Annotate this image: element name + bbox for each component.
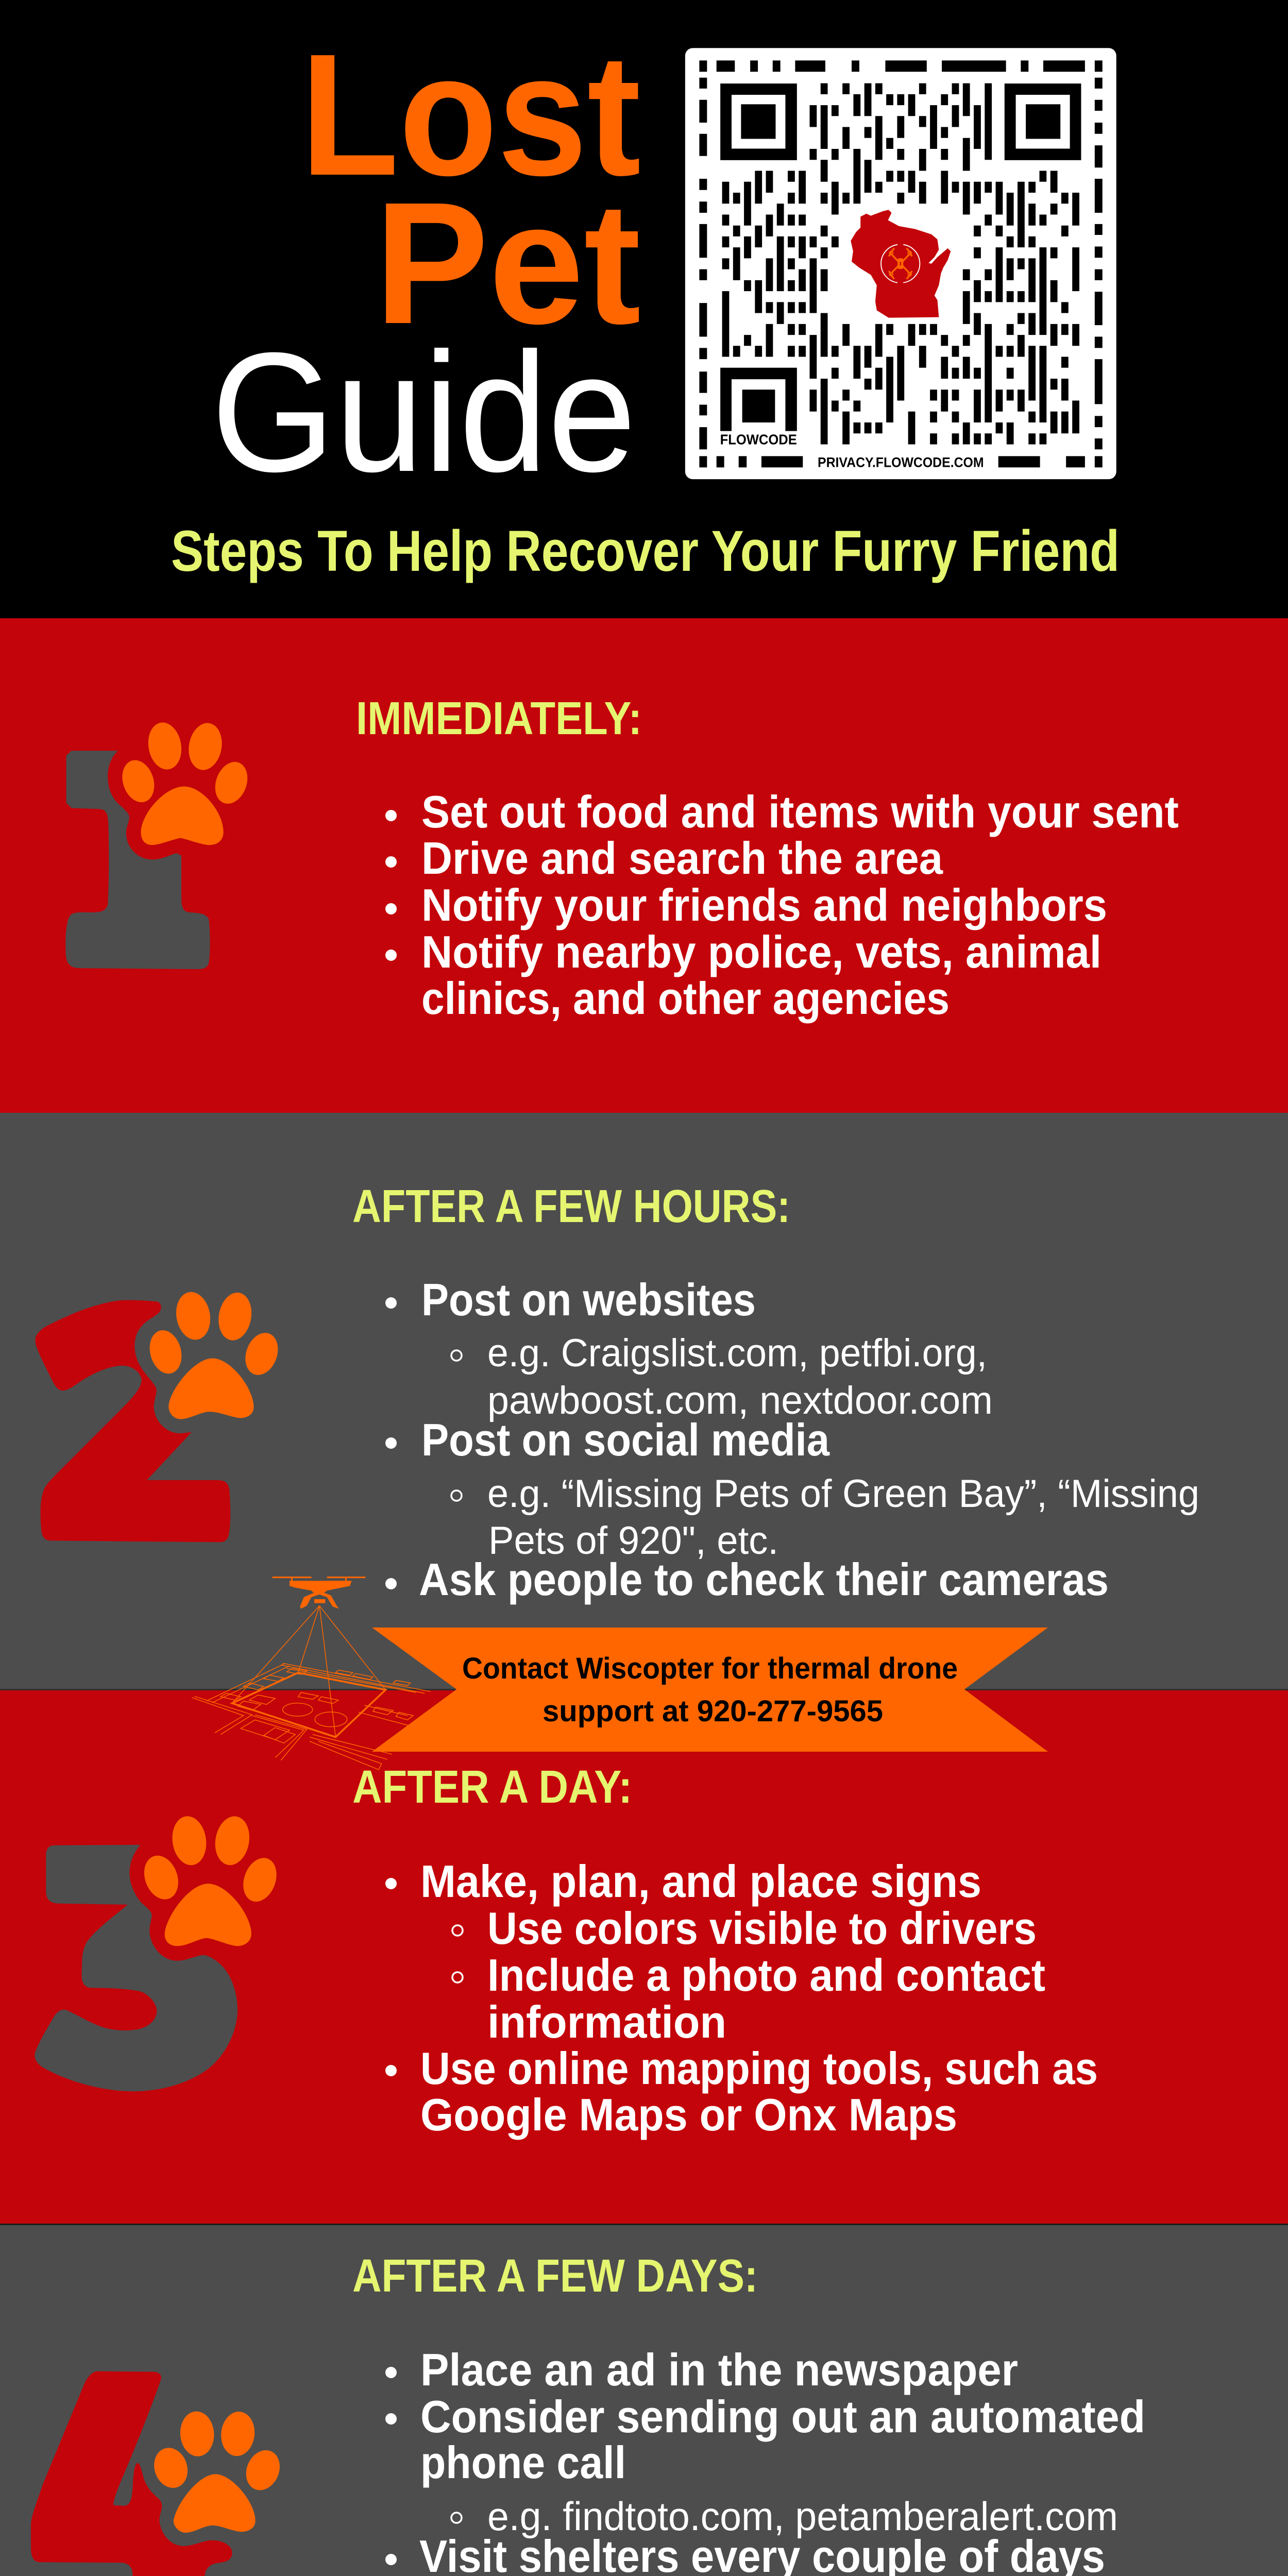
- bullet list: Use online mapping tools, such as: [420, 2043, 1098, 2094]
- bullet list: Notify nearby police, vets, animal: [421, 926, 1101, 977]
- illustration: drone scanning a map: [192, 1577, 430, 1770]
- subtitle: Steps To Help Recover Your Furry Friend: [171, 519, 1120, 583]
- bullet list: clinics, and other agencies: [421, 973, 950, 1024]
- bullet list: Set out food and items with your sent: [421, 786, 1179, 837]
- QR code: PRIVACY.FLOWCODE.COM: [818, 455, 984, 470]
- QR code: [685, 48, 1116, 479]
- number 3 and paw: [35, 1814, 282, 2091]
- bullet list: Ask people to check their cameras: [419, 1554, 1109, 1605]
- panel: step 3 after a day: [0, 1689, 1288, 2225]
- title: Guide: Guide: [211, 317, 636, 507]
- bullet list: Google Maps or Onx Maps: [420, 2089, 957, 2140]
- panel: step 2 after a few hours: [0, 1113, 1288, 1690]
- title: Lost: Lost: [300, 18, 641, 212]
- heading: AFTER A FEW HOURS:: [352, 1181, 790, 1232]
- number 1 and paw: [65, 720, 253, 969]
- title: Pet: Pet: [375, 166, 641, 360]
- bullet list: [385, 2344, 1208, 2576]
- bullet list: Include a photo and contact: [487, 1950, 1045, 2001]
- number 2 and paw: [35, 1289, 283, 1542]
- callout banner: [372, 1628, 1048, 1752]
- panel: step 1 immediately: [0, 618, 1288, 1113]
- bullet list: [385, 1856, 1098, 2140]
- bullet list: e.g. “Missing Pets of Green Bay”, “Missing: [487, 1472, 1199, 1516]
- number 4 and paw: [31, 2371, 285, 2576]
- header: [171, 18, 1120, 583]
- callout text: [462, 1652, 958, 1728]
- bullet list: pawboost.com, nextdoor.com: [487, 1379, 993, 1422]
- bullet list: Post on social media: [421, 1414, 830, 1465]
- bullet list: Post on websites: [421, 1274, 756, 1325]
- heading: AFTER A DAY:: [352, 1761, 632, 1813]
- bullet list: e.g. Craigslist.com, petfbi.org,: [487, 1331, 987, 1375]
- bullet list: Use colors visible to drivers: [487, 1903, 1037, 1954]
- bullet list: Pets of 920", etc.: [488, 1519, 778, 1563]
- bullet list: Consider sending out an automated: [420, 2391, 1145, 2442]
- bullet list: [385, 1274, 1199, 1605]
- callout text: support at 920-277-9565: [543, 1694, 883, 1728]
- bullet list: Make, plan, and place signs: [420, 1856, 981, 1907]
- panel: step 4 after a few days: [0, 2224, 1288, 2576]
- bullet list: information: [487, 1996, 726, 2047]
- bullet list: Place an ad in the newspaper: [420, 2344, 1018, 2395]
- heading: IMMEDIATELY:: [356, 693, 642, 744]
- callout text: Contact Wiscopter for thermal drone: [462, 1652, 958, 1685]
- bullet list: [385, 786, 1179, 1024]
- bullet list: Notify your friends and neighbors: [421, 879, 1107, 930]
- bullet list: phone call: [420, 2437, 626, 2488]
- bullet list: e.g. findtoto.com, petamberalert.com: [487, 2494, 1118, 2539]
- QR code: FLOWCODE: [720, 431, 797, 447]
- heading: AFTER A FEW DAYS:: [352, 2250, 758, 2302]
- bullet list: Drive and search the area: [421, 833, 943, 884]
